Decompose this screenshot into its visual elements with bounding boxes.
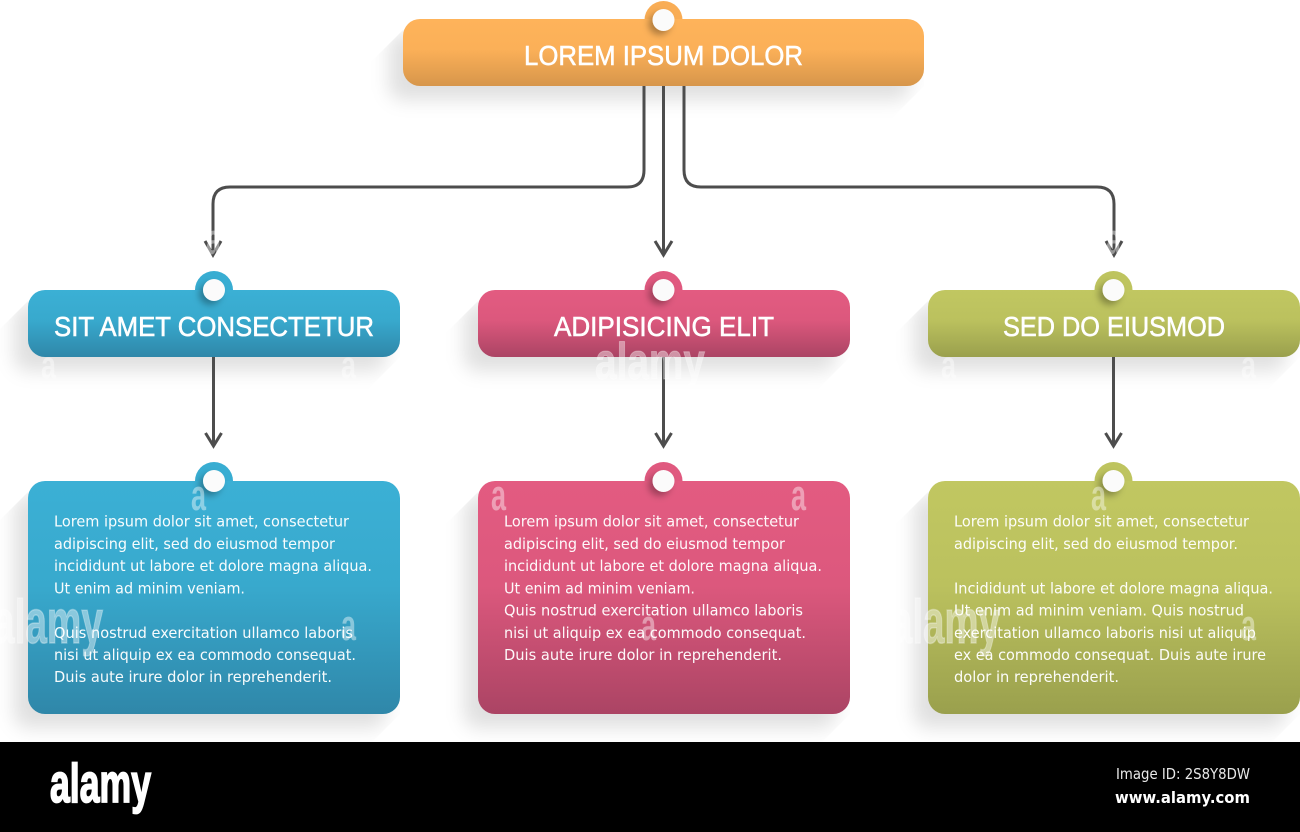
watermarks: a (791, 471, 806, 520)
panel: pink header (478, 271, 850, 357)
footer logo: alamy (50, 752, 151, 814)
watermarks: a (1241, 601, 1256, 650)
watermarks (0, 215, 1257, 657)
watermarks: a (641, 601, 656, 650)
connector arrows from title (205, 86, 1122, 255)
arrow: pink header to text (656, 357, 672, 446)
panel: pink text: adipiscing elit, sed do eiusmod tempor (504, 535, 786, 553)
watermarks: a (491, 471, 506, 520)
watermarks: a (41, 345, 57, 387)
panel: blue header (28, 271, 400, 357)
panel: green text (928, 462, 1300, 714)
arrow: green header to text (1106, 357, 1122, 446)
panel: title (403, 1, 924, 86)
panel: green text: adipiscing elit, sed do eiusmod tempor. (954, 535, 1238, 553)
watermarks: a (1106, 215, 1121, 264)
panel: pink text (478, 462, 850, 714)
panel: blue text (28, 462, 400, 714)
panel: green text: Ut enim ad minim veniam. Quis nostrud (954, 602, 1244, 620)
panel: blue text: Duis aute irure dolor in reprehenderit. (54, 668, 332, 686)
watermarks: a (341, 601, 356, 650)
image id: Image ID: 2S8Y8DW (1116, 765, 1250, 783)
watermarks: a (1241, 345, 1257, 387)
watermarks: a (941, 345, 957, 387)
panel: blue text: adipiscing elit, sed do eiusmod tempor (54, 535, 336, 553)
arrow: blue header to text (206, 357, 222, 446)
watermarks: a (191, 471, 206, 520)
panel: green header (928, 271, 1300, 357)
column: blue (28, 271, 400, 714)
watermarks: a (206, 215, 221, 264)
panel: pink text: Lorem ipsum dolor sit amet, consectetur (504, 512, 800, 530)
panel: blue text: Lorem ipsum dolor sit amet, consectetur (54, 512, 350, 530)
panel: green text: Incididunt ut labore et dolore magna aliqua. (954, 580, 1273, 598)
panel: green text: Lorem ipsum dolor sit amet, consectetur (954, 512, 1250, 530)
panel: green text: ex ea commodo consequat. Duis aute irure (954, 646, 1266, 664)
panel: blue text: nisi ut aliquip ex ea commodo consequat. (54, 646, 356, 664)
panel: pink text: incididunt ut labore et dolore magna aliqua. (504, 557, 822, 575)
panel: green text: exercitation ullamco laboris nisi ut aliquip (954, 624, 1256, 642)
panel: green header: SED DO EIUSMOD (1003, 311, 1225, 342)
panel: pink text: Ut enim ad minim veniam. (504, 580, 695, 598)
panel: blue text: Ut enim ad minim veniam. (54, 580, 245, 598)
footer band (0, 742, 1300, 832)
panel: pink text: Duis aute irure dolor in reprehenderit. (504, 646, 782, 664)
column: green (928, 271, 1300, 714)
watermarks: alamy (595, 333, 705, 391)
icon: title pin (652, 9, 674, 31)
title text: LOREM IPSUM DOLOR (524, 40, 803, 71)
column: pink (478, 271, 850, 714)
panel: pink header: ADIPISICING ELIT (554, 311, 774, 342)
panel: pink text: nisi ut aliquip ex ea commodo consequat. (504, 624, 806, 642)
panel: blue text: Quis nostrud exercitation ullamco laboris (54, 624, 353, 642)
watermarks: a (341, 345, 357, 387)
watermarks: a (1091, 471, 1106, 520)
watermarks: alamy (891, 588, 1000, 657)
website: www.alamy.com (1115, 788, 1250, 807)
panel: blue text: incididunt ut labore et dolore magna aliqua. (54, 557, 372, 575)
panel: blue header: SIT AMET CONSECTETUR (54, 311, 374, 342)
panel: pink text: Quis nostrud exercitation ullamco laboris (504, 602, 803, 620)
panel: green text: dolor in reprehenderit. (954, 668, 1119, 686)
